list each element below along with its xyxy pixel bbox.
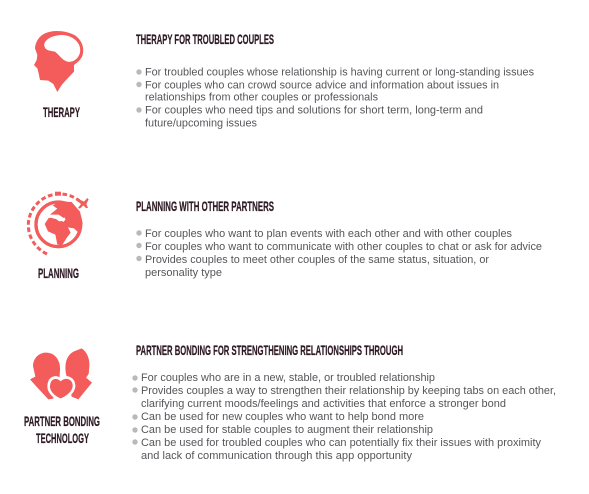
bullet list: planning [136,228,542,279]
icon: two faces with heart [30,348,92,399]
label: therapy: THERAPY [43,104,80,120]
bullet list: planning: For couples who want to plan events with each other and with other couples [145,228,512,240]
label: partner bonding technology: TECHNOLOGY [36,430,89,446]
bullet list: partner bonding: Provides couples a way to strengthen their relationship by keeping tabs on each other, [141,385,556,397]
icon: globe with plane [28,192,89,254]
bullet list: therapy: relationships from other couples or professionals [145,92,378,104]
panel: partner bonding [24,342,556,462]
panel: therapy [34,31,534,129]
label: partner bonding technology: PARTNER BONDING [24,413,100,429]
bullet list: planning: For couples who want to communicate with other couples to chat or ask for advice [145,241,542,253]
bullet list: therapy: For couples who need tips and solutions for short term, long-term and [145,104,483,116]
bullet list: partner bonding: Can be used for new couples who want to help bond more [141,411,424,423]
bullet list: planning: personality type [145,267,222,279]
heading: therapy: THERAPY FOR TROUBLED COUPLES [136,31,274,47]
icon: head with brain [34,31,83,92]
bullet list: therapy: future/upcoming issues [145,118,257,130]
bullet list: partner bonding: Can be used for troubled couples who can potentially fix their issues with proximity [141,437,541,449]
label: partner bonding technology [24,413,100,446]
bullet list: therapy: For troubled couples whose relationship is having current or long-standing issues [145,66,534,78]
bullet list: partner bonding: Can be used for stable couples to augment their relationship [141,424,433,436]
bullet list: partner bonding: For couples who are in a new, stable, or troubled relationship [141,372,435,384]
label: planning: PLANNING [38,265,79,281]
bullet list: partner bonding [132,372,556,462]
heading: planning: PLANNING WITH OTHER PARTNERS [136,198,274,214]
bullet list: therapy: For couples who can crowd source advice and information about issues in [145,80,499,92]
panel: planning [28,192,542,281]
bullet list: partner bonding: and lack of communication through this app opportunity [141,450,412,462]
bullet list: therapy [136,66,534,130]
bullet list: partner bonding: clarifying current moods/feelings and activities that enforce a stronger bond [141,398,506,410]
bullet list: planning: Provides couples to meet other couples of the same status, situation, or [145,254,489,266]
